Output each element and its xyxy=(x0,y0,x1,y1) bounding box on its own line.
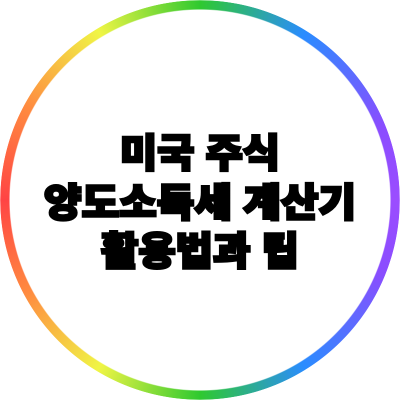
title line 3: 활용법과 팁 xyxy=(101,231,299,274)
title line 2: 양도소득세 계산기 xyxy=(44,182,356,226)
title line 1: 미국 주식 xyxy=(120,133,280,176)
